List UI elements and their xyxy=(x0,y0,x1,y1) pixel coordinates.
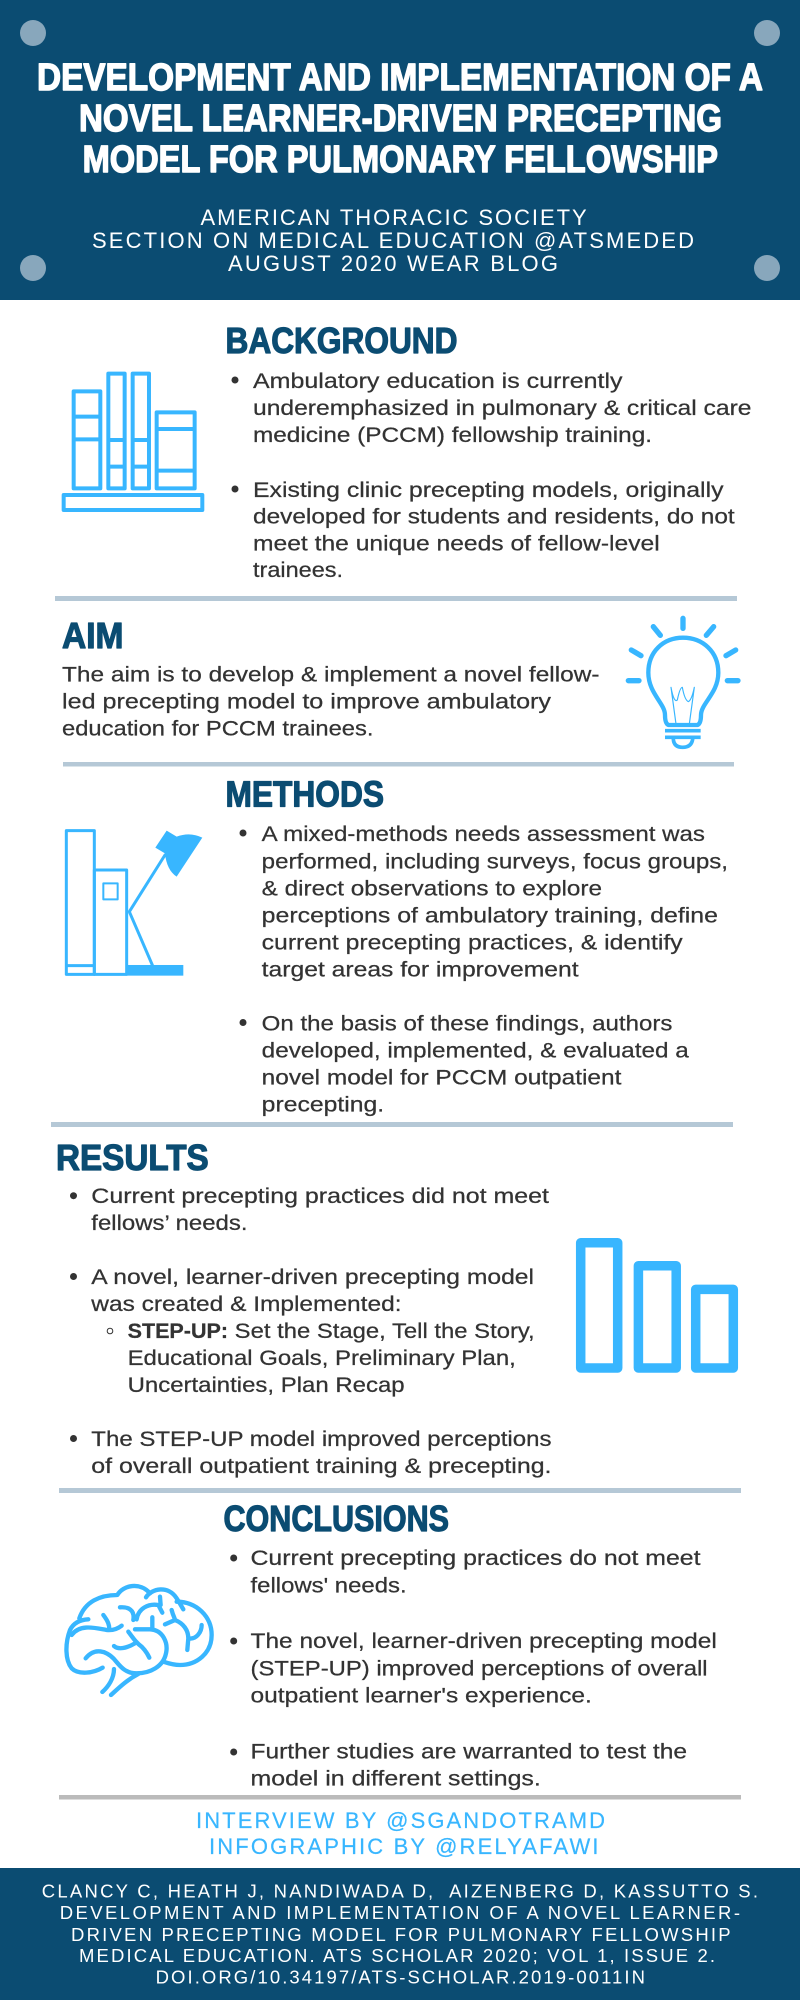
text: background bullets: meet the unique needs of fellow-level xyxy=(253,532,660,556)
heading: results: RESULTS xyxy=(56,1137,209,1178)
text: background bullets: Existing clinic precepting models, originally xyxy=(253,478,724,502)
heading: aim: AIM xyxy=(62,615,124,656)
text: methods bullets: developed, implemented, & evaluated a xyxy=(262,1038,689,1062)
text: conclusions bullets: fellows' needs. xyxy=(250,1574,407,1598)
text: results bullets: STEP-UP: xyxy=(128,1319,228,1343)
text: background bullets: developed for students and residents, do not xyxy=(253,504,735,528)
text: methods bullets: current precepting practices, & identify xyxy=(262,930,683,954)
heading: background: BACKGROUND xyxy=(226,320,458,361)
panel: citation footer xyxy=(0,1868,800,2000)
text: methods bullets xyxy=(240,822,728,1116)
text: aim: education for PCCM trainees. xyxy=(62,716,374,740)
text: background bullets: Ambulatory education is currently xyxy=(253,369,623,393)
icon: books on a shelf xyxy=(64,374,202,510)
text: methods bullets: novel model for PCCM outpatient xyxy=(262,1065,621,1089)
subtitle: AMERICAN THORACIC SOCIETY xyxy=(200,205,587,230)
text: results bullets: A novel, learner-driven precepting model xyxy=(91,1265,534,1289)
text: results bullets: Current precepting practices did not meet xyxy=(91,1184,549,1208)
text: methods bullets: target areas for improvement xyxy=(262,957,579,981)
text: conclusions bullets: (STEP-UP) improved perceptions of overall xyxy=(250,1657,708,1681)
subtitle xyxy=(92,205,694,276)
text: conclusions bullets: Further studies are warranted to test the xyxy=(250,1740,687,1764)
text: results bullets: of overall outpatient training & precepting. xyxy=(91,1454,552,1478)
panel: citation footer: DOI.ORG/10.34197/ATS-SCHOLAR.2019-0011IN xyxy=(156,1967,645,1988)
text: results bullets: Set the Stage, Tell the Story, xyxy=(235,1319,535,1343)
text: conclusions bullets: outpatient learner's experience. xyxy=(250,1684,592,1708)
text: methods bullets: performed, including surveys, focus groups, xyxy=(262,849,728,873)
icon: light bulb xyxy=(628,618,738,747)
panel: citation footer: CLANCY C, HEATH J, NANDIWADA D, AIZENBERG D, KASSUTTO S. xyxy=(42,1881,758,1902)
text: conclusions bullets xyxy=(230,1546,717,1791)
text: background bullets xyxy=(232,369,752,582)
text: conclusions bullets: Current precepting practices do not meet xyxy=(250,1546,701,1570)
text: methods bullets: On the basis of these findings, authors xyxy=(262,1011,672,1035)
text: methods bullets: precepting. xyxy=(262,1092,384,1116)
text: methods bullets: A mixed-methods needs assessment was xyxy=(262,822,705,846)
panel: citation footer: DEVELOPMENT AND IMPLEMENTATION OF A NOVEL LEARNER- xyxy=(60,1902,740,1923)
text: aim: led precepting model to improve ambulatory xyxy=(62,690,551,714)
icon: books and desk lamp xyxy=(66,831,202,976)
title xyxy=(37,57,763,181)
text: aim: The aim is to develop & implement a novel fellow- xyxy=(62,663,600,687)
corner dots xyxy=(20,20,780,281)
credits xyxy=(196,1808,605,1859)
panel: citation footer: DRIVEN PRECEPTING MODEL FOR PULMONARY FELLOWSHIP xyxy=(71,1924,731,1945)
text: results bullets: Uncertainties, Plan Recap xyxy=(128,1373,405,1397)
credits: INTERVIEW BY @SGANDOTRAMD xyxy=(196,1808,605,1833)
icon: brain xyxy=(66,1586,212,1695)
text: results bullets: The STEP-UP model improved perceptions xyxy=(91,1427,552,1451)
panel: citation footer: MEDICAL EDUCATION. ATS SCHOLAR 2020; VOL 1, ISSUE 2. xyxy=(79,1945,715,1966)
text: results bullets xyxy=(70,1184,552,1478)
text: aim xyxy=(62,663,600,740)
text: methods bullets: & direct observations to explore xyxy=(262,876,602,900)
subtitle: SECTION ON MEDICAL EDUCATION @ATSMEDED xyxy=(92,228,694,253)
text: results bullets: Educational Goals, Preliminary Plan, xyxy=(128,1346,516,1370)
panel: header xyxy=(0,0,800,300)
text: background bullets: medicine (PCCM) fellowship training. xyxy=(253,423,652,447)
text: methods bullets: perceptions of ambulatory training, define xyxy=(262,903,718,927)
icon: bar chart xyxy=(581,1243,733,1368)
subtitle: AUGUST 2020 WEAR BLOG xyxy=(228,251,558,276)
credits: INFOGRAPHIC BY @RELYAFAWI xyxy=(209,1834,598,1859)
text: background bullets: underemphasized in pulmonary & critical care xyxy=(253,396,752,420)
text: background bullets: trainees. xyxy=(253,558,343,582)
text: results bullets: was created & Implemented: xyxy=(90,1292,401,1316)
text: results bullets: fellows’ needs. xyxy=(91,1211,248,1235)
title: NOVEL LEARNER-DRIVEN PRECEPTING xyxy=(79,98,722,140)
text: conclusions bullets: The novel, learner-driven precepting model xyxy=(250,1629,717,1653)
text: conclusions bullets: model in different settings. xyxy=(250,1767,541,1791)
heading: methods: METHODS xyxy=(226,774,384,814)
heading: conclusions: CONCLUSIONS xyxy=(224,1498,449,1539)
